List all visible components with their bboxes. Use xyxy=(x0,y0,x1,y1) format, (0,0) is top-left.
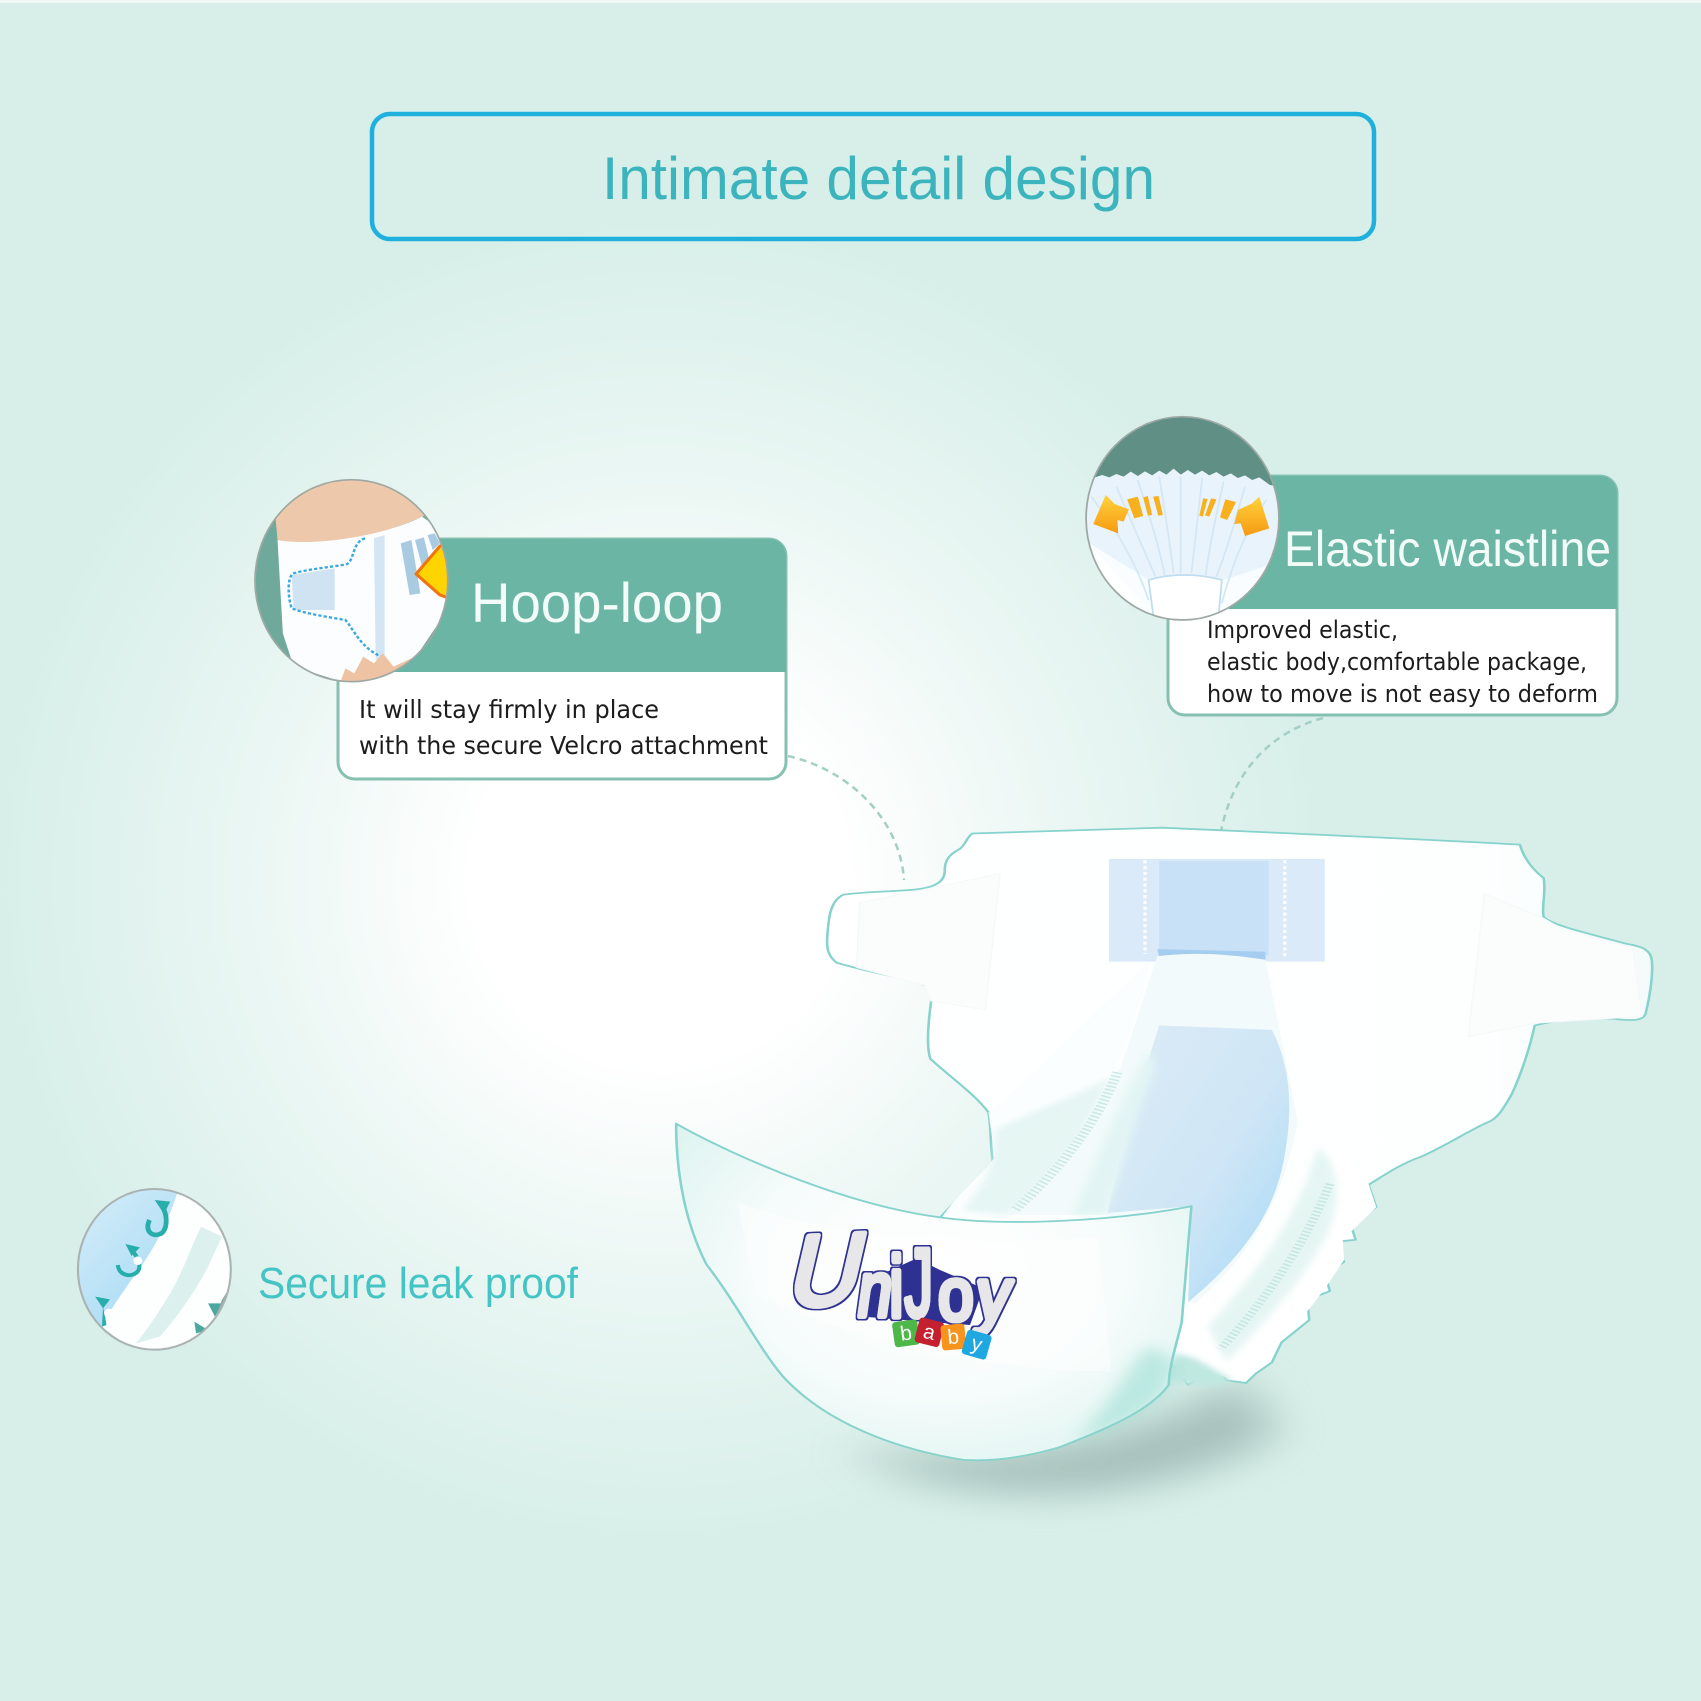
left leg cuff xyxy=(943,961,1156,1220)
diaper back sheet xyxy=(827,828,1652,1385)
diaper illustration xyxy=(676,828,1652,1494)
flap textured panel xyxy=(737,1202,1111,1371)
logo baby blocks: b xyxy=(947,1325,960,1349)
title banner xyxy=(372,114,1374,239)
description: elastic waistline xyxy=(1207,616,1598,708)
logo wordmark: n xyxy=(853,1247,898,1333)
logo baby blocks: y xyxy=(969,1332,986,1357)
logo wordmark: i xyxy=(889,1240,903,1336)
callout: secure leak proof xyxy=(74,1187,579,1353)
description: elastic waistline: elastic body,comfortable package, xyxy=(1207,648,1587,676)
logo wordmark xyxy=(780,1212,1017,1337)
logo: Unijoy baby xyxy=(780,1212,1017,1360)
diaper shadow xyxy=(847,1376,1278,1494)
elastic waistband xyxy=(1109,859,1325,962)
title text: Intimate detail design xyxy=(602,145,1155,212)
description: hoop-loop: with the secure Velcro attachment xyxy=(359,731,768,760)
panel: hoop-loop xyxy=(251,473,786,779)
panel: elastic waistline xyxy=(1081,413,1617,715)
logo baby blocks xyxy=(892,1317,992,1360)
icon: leak guard detail xyxy=(74,1187,236,1353)
label: secure leak proof: Secure leak proof xyxy=(258,1259,579,1308)
logo wordmark: U xyxy=(780,1212,877,1329)
icon: hoop-loop closure detail xyxy=(251,473,454,690)
description: elastic waistline: Improved elastic, xyxy=(1207,616,1398,644)
description: elastic waistline: how to move is not easy to deform xyxy=(1207,680,1598,708)
logo baby blocks: b xyxy=(899,1321,913,1346)
inner core sheet xyxy=(943,954,1298,1304)
heading: elastic waistline: Elastic waistline xyxy=(1284,521,1611,577)
waist ear panels xyxy=(856,874,1642,1037)
logo baby blocks: a xyxy=(921,1320,938,1345)
absorbent pad xyxy=(1108,1025,1289,1302)
connector: elastic waistline to diaper xyxy=(1217,718,1323,880)
description: hoop-loop xyxy=(359,695,768,760)
flap tint xyxy=(1072,1345,1175,1443)
logo wordmark: y xyxy=(972,1253,1017,1336)
logo wordmark: J xyxy=(905,1229,933,1337)
right leg cuff xyxy=(1162,1121,1376,1387)
icon: elastic waist detail xyxy=(1081,413,1284,627)
logo wordmark: o xyxy=(938,1254,973,1336)
logo dark backing xyxy=(863,1258,983,1325)
heading: hoop-loop: Hoop-loop xyxy=(471,571,723,634)
connector: hoop-loop to diaper xyxy=(788,756,904,880)
description: hoop-loop: It will stay firmly in place xyxy=(359,695,659,724)
front flap xyxy=(676,1124,1191,1460)
